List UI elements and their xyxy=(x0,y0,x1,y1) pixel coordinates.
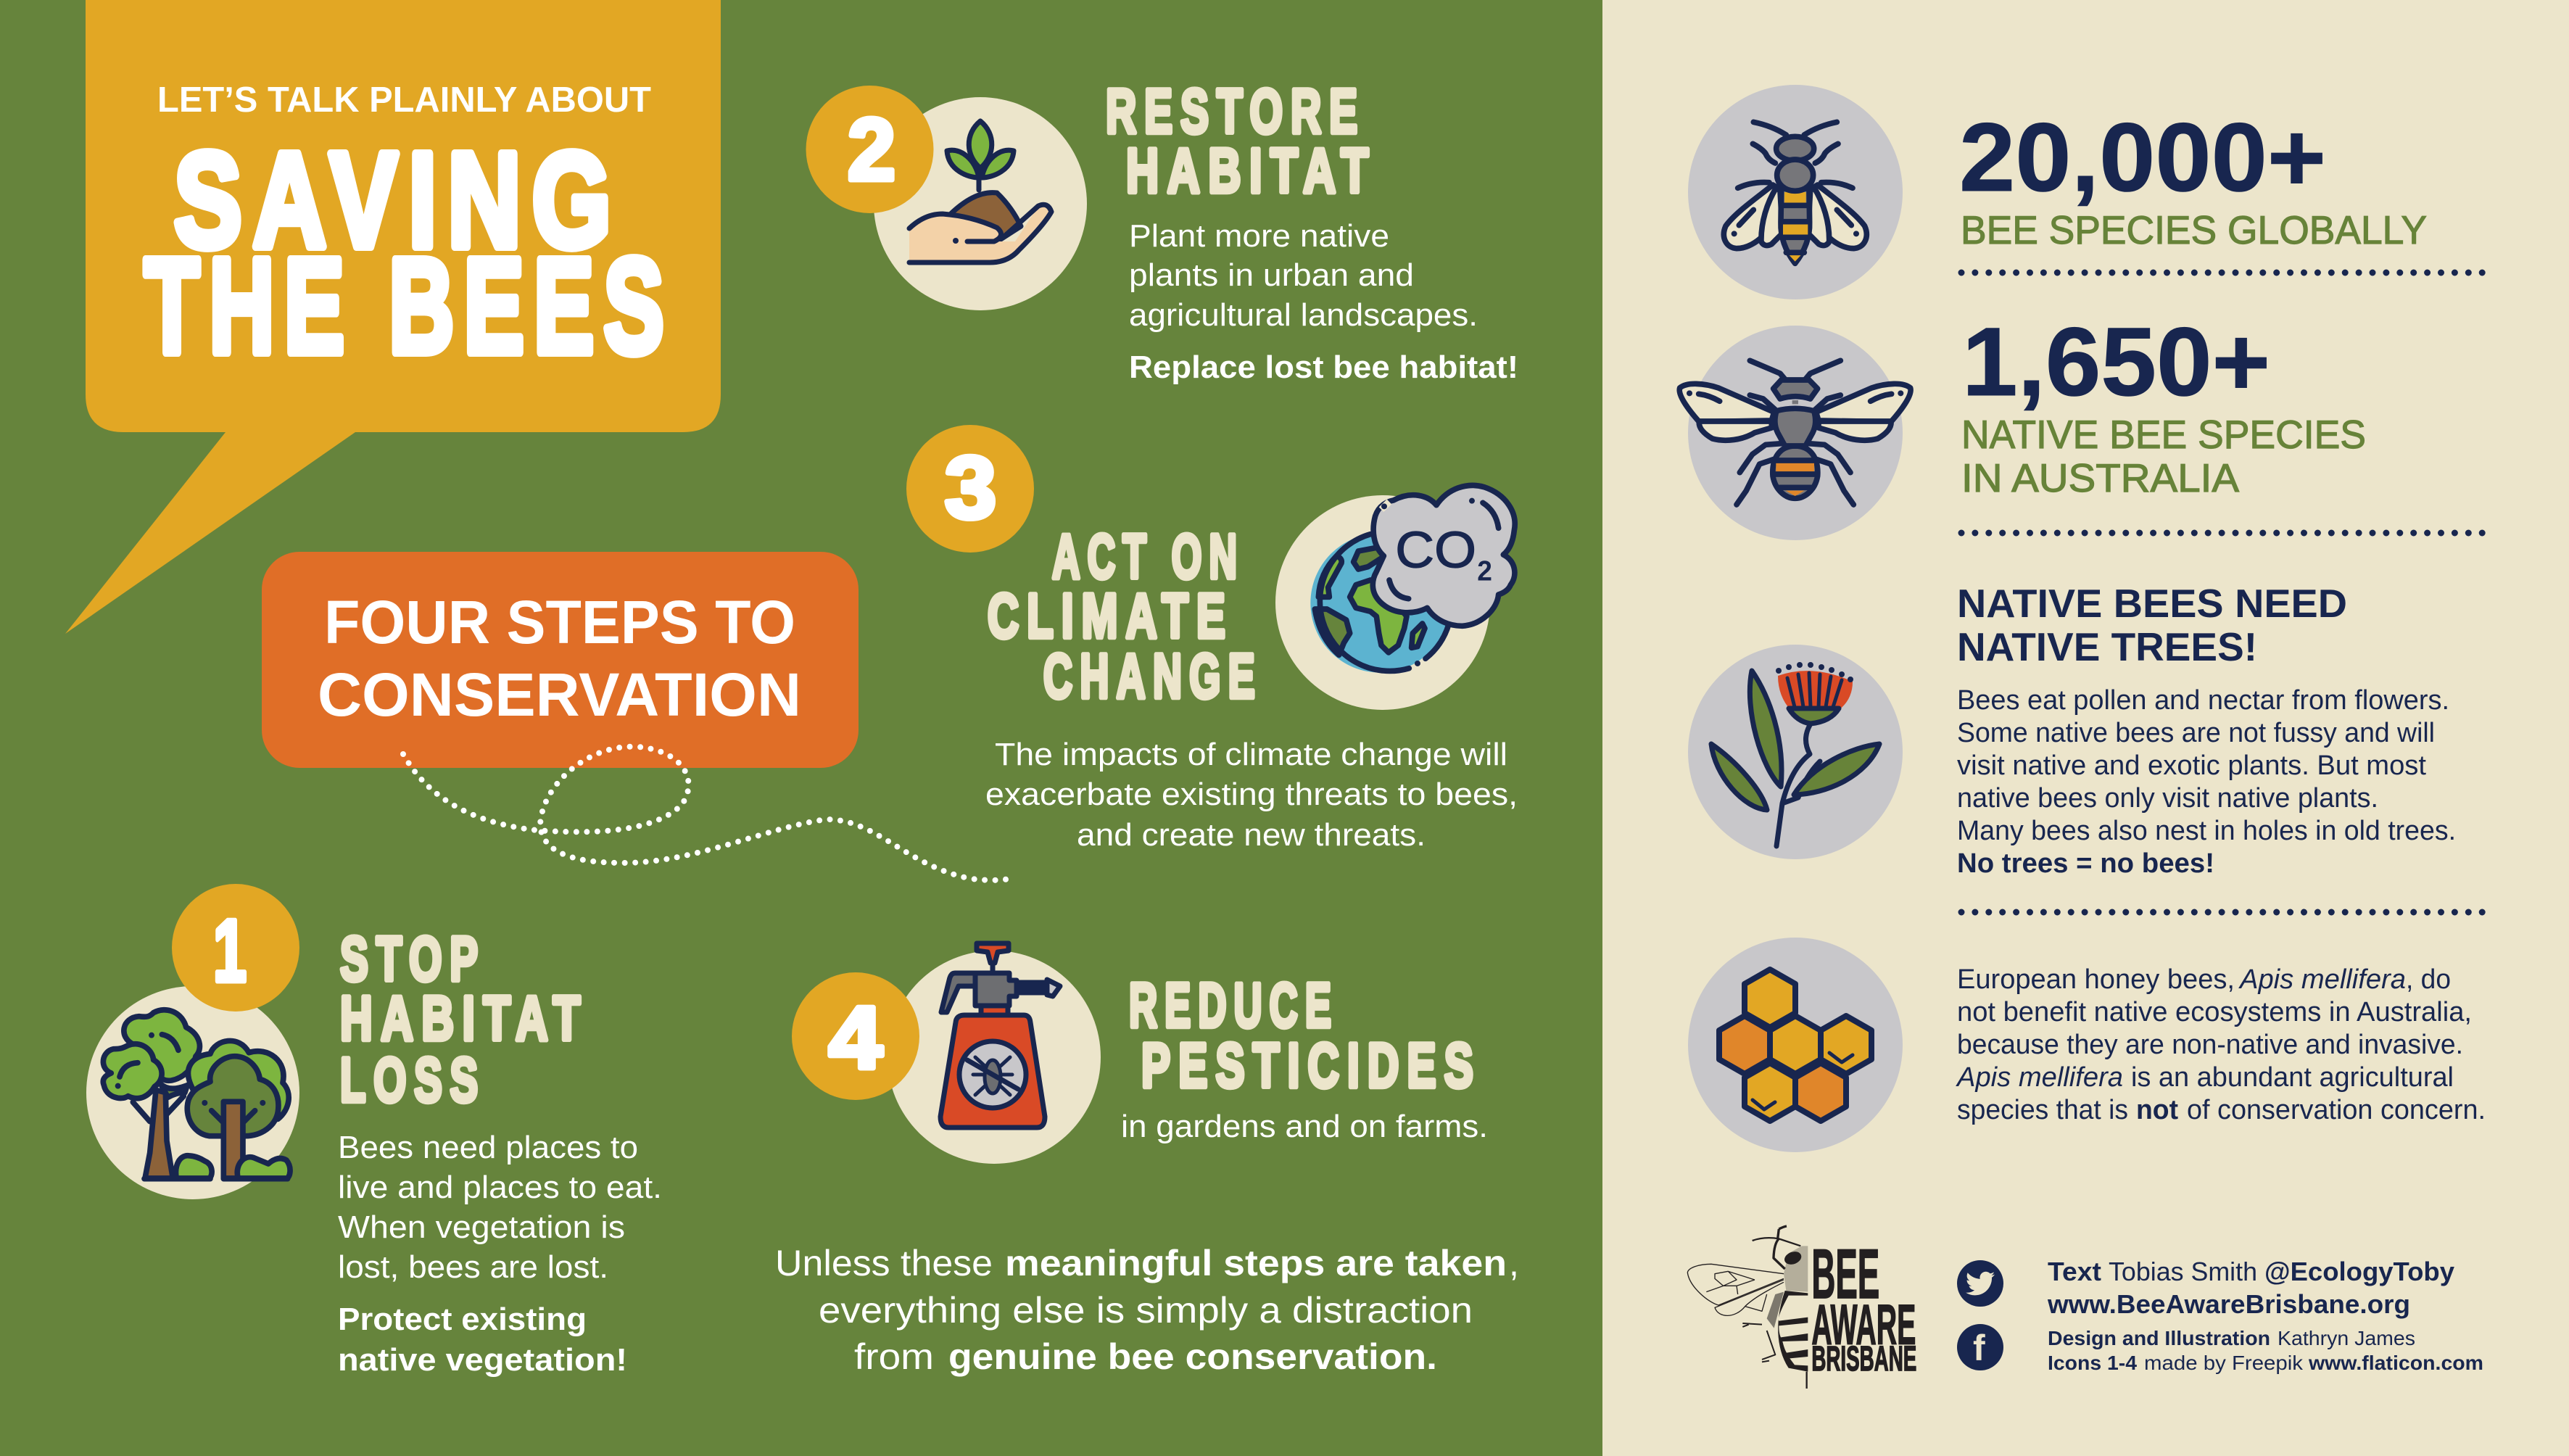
icon backdrop xyxy=(1688,326,1903,540)
statistic number: 1,650+ xyxy=(1962,308,2270,416)
statistic label: NATIVE BEE SPECIES xyxy=(1961,412,2366,457)
credits xyxy=(2047,1257,2483,1374)
credits: made by Freepik xyxy=(2144,1352,2304,1374)
logo wordmark: BEE xyxy=(1811,1236,1879,1313)
icon backdrop xyxy=(86,986,299,1199)
credits: Text xyxy=(2048,1257,2101,1286)
heading: HABITAT xyxy=(1126,136,1377,206)
body text: plants in urban and xyxy=(1129,257,1414,293)
heading xyxy=(1106,77,1377,206)
heading: PESTICIDES xyxy=(1141,1031,1481,1101)
icon backdrop xyxy=(888,951,1101,1164)
icon: native bee xyxy=(1679,360,1911,505)
icon: facebook xyxy=(1957,1324,2003,1370)
number badge 1 xyxy=(172,884,299,1012)
logo wordmark xyxy=(1811,1236,1916,1378)
speech bubble title panel xyxy=(65,0,721,634)
body text: not benefit native ecosystems in Australia, xyxy=(1957,997,2472,1027)
body text: Apis mellifera xyxy=(2238,964,2406,995)
call to action: native vegetation! xyxy=(338,1342,627,1378)
body text: Many bees also nest in holes in old trees. xyxy=(1957,816,2456,846)
statistic label xyxy=(1961,412,2366,500)
icon: flowering gum xyxy=(1711,662,1879,846)
icon: facebook: f xyxy=(1973,1328,1985,1368)
icon: honeycomb xyxy=(1719,969,1871,1121)
body text xyxy=(1957,685,2456,879)
body text: of conservation concern. xyxy=(2187,1095,2486,1125)
call to action: Replace lost bee habitat! xyxy=(1129,349,1518,385)
heading: HABITAT xyxy=(340,984,589,1054)
body text: exacerbate existing threats to bees, xyxy=(985,777,1518,812)
logo: Bee Aware Brisbane xyxy=(1687,1226,1916,1389)
body text: is an abundant agricultural xyxy=(2131,1062,2454,1093)
section heading: NATIVE TREES! xyxy=(1957,624,2257,669)
closing statement: , xyxy=(1509,1243,1519,1283)
body text: lost, bees are lost. xyxy=(338,1249,608,1285)
body text: and create new threats. xyxy=(1077,817,1426,853)
closing statement xyxy=(775,1243,1519,1377)
panel: facts sidebar background xyxy=(1602,0,2569,1456)
body text: species that is xyxy=(1957,1095,2128,1125)
closing statement: everything else is simply a distraction xyxy=(819,1290,1473,1331)
closing statement: from xyxy=(854,1336,934,1377)
credits: www.BeeAwareBrisbane.org xyxy=(2047,1289,2410,1319)
body text: in gardens and on farms. xyxy=(1121,1109,1488,1144)
dotted flight path xyxy=(403,747,1009,880)
body text xyxy=(1956,964,2486,1125)
icon backdrop xyxy=(1275,495,1490,710)
orange subtitle box xyxy=(262,552,859,768)
number badge 4 xyxy=(792,972,919,1100)
closing statement: genuine bee conservation. xyxy=(948,1336,1437,1377)
statistic label: BEE SPECIES GLOBALLY xyxy=(1961,207,2427,252)
panel: native trees xyxy=(1688,581,2456,879)
body text: Bees need places to xyxy=(338,1130,638,1165)
icon: hand holding seedling xyxy=(909,121,1051,262)
body text: The impacts of climate change will xyxy=(995,737,1507,772)
body text xyxy=(338,1130,662,1285)
heading: REDUCE xyxy=(1129,971,1339,1041)
icon: trees xyxy=(103,1010,290,1179)
body text: , do xyxy=(2406,964,2451,995)
number badge 4: 4 xyxy=(829,988,882,1087)
icon: earth and CO2 cloud: CO xyxy=(1395,521,1476,578)
number badge 3 xyxy=(906,425,1034,553)
main title: THE BEES xyxy=(144,231,674,381)
icon backdrop xyxy=(1688,85,1903,299)
body text: live and places to eat. xyxy=(338,1170,662,1205)
heading: CHANGE xyxy=(1043,642,1262,711)
kicker text: LET’S TALK PLAINLY ABOUT xyxy=(157,80,651,120)
body text: No trees = no bees! xyxy=(1957,848,2214,879)
body text: Plant more native xyxy=(1129,218,1389,254)
step 3: act on climate change xyxy=(906,425,1518,853)
heading xyxy=(340,925,589,1115)
credits: Kathryn James xyxy=(2278,1327,2415,1349)
icon backdrop xyxy=(1688,938,1903,1152)
panel: honey bees xyxy=(1688,938,2486,1152)
credits: @EcologyToby xyxy=(2264,1257,2454,1286)
body text: Bees eat pollen and nectar from flowers. xyxy=(1957,685,2449,716)
logo bee drawing xyxy=(1687,1226,1807,1389)
heading: RESTORE xyxy=(1106,77,1365,146)
statistic number: 20,000+ xyxy=(1959,104,2326,212)
icon backdrop xyxy=(1688,645,1903,859)
step 4: reduce pesticides xyxy=(792,943,1488,1164)
statistic label: IN AUSTRALIA xyxy=(1961,455,2239,500)
body text: Apis mellifera xyxy=(1956,1062,2123,1093)
icon: spray bottle xyxy=(940,943,1060,1128)
logo wordmark: AWARE xyxy=(1811,1294,1916,1356)
icon backdrop xyxy=(874,97,1087,310)
panel: global species stat xyxy=(1688,85,2427,299)
body text: because they are non-native and invasive. xyxy=(1957,1030,2463,1060)
orange subtitle box: CONSERVATION xyxy=(318,661,801,729)
heading: ACT ON xyxy=(1052,522,1244,592)
icon: earth and CO2 cloud xyxy=(1310,485,1515,673)
speech bubble shape xyxy=(65,0,721,634)
section heading xyxy=(1957,581,2347,669)
step 1: stop habitat loss xyxy=(86,884,662,1378)
body text xyxy=(1129,218,1478,333)
heading xyxy=(1129,971,1481,1101)
icon: honey bee xyxy=(1724,122,1866,263)
logo bee body xyxy=(1767,1246,1808,1372)
call to action xyxy=(338,1302,627,1378)
body text: European honey bees, xyxy=(1957,964,2235,995)
number badge 2: 2 xyxy=(848,100,895,199)
credits: Icons 1-4 xyxy=(2048,1352,2137,1374)
main title: SAVING xyxy=(174,125,622,276)
call to action: Protect existing xyxy=(338,1302,587,1337)
logo wordmark: BRISBANE xyxy=(1811,1339,1916,1378)
closing statement: Unless these xyxy=(775,1243,993,1283)
number badge 2 xyxy=(806,86,934,213)
credits: www.flaticon.com xyxy=(2308,1352,2483,1374)
main title xyxy=(144,125,674,381)
step 2: restore habitat xyxy=(806,77,1518,385)
panel: native species stat xyxy=(1679,308,2366,540)
icon: earth and CO2 cloud: 2 xyxy=(1477,555,1492,587)
body text: Some native bees are not fussy and will xyxy=(1957,718,2435,748)
icon: twitter xyxy=(1957,1260,2003,1307)
number badge 3: 3 xyxy=(945,438,996,537)
number badge 1: 1 xyxy=(213,901,247,1000)
body text: When vegetation is xyxy=(338,1209,625,1245)
heading: LOSS xyxy=(340,1046,486,1115)
body text: agricultural landscapes. xyxy=(1129,297,1478,333)
body text: visit native and exotic plants. But most xyxy=(1957,750,2426,781)
heading: CLIMATE xyxy=(988,582,1233,651)
heading xyxy=(988,522,1262,711)
section heading: NATIVE BEES NEED xyxy=(1957,581,2347,626)
credits: Design and Illustration xyxy=(2048,1327,2270,1349)
orange subtitle box: FOUR STEPS TO xyxy=(324,588,795,656)
closing statement: meaningful steps are taken xyxy=(1005,1243,1507,1283)
body text: not xyxy=(2136,1095,2178,1125)
credits: Tobias Smith xyxy=(2109,1257,2257,1286)
heading: STOP xyxy=(340,925,486,994)
body text: native bees only visit native plants. xyxy=(1957,783,2378,814)
body text xyxy=(985,737,1518,853)
